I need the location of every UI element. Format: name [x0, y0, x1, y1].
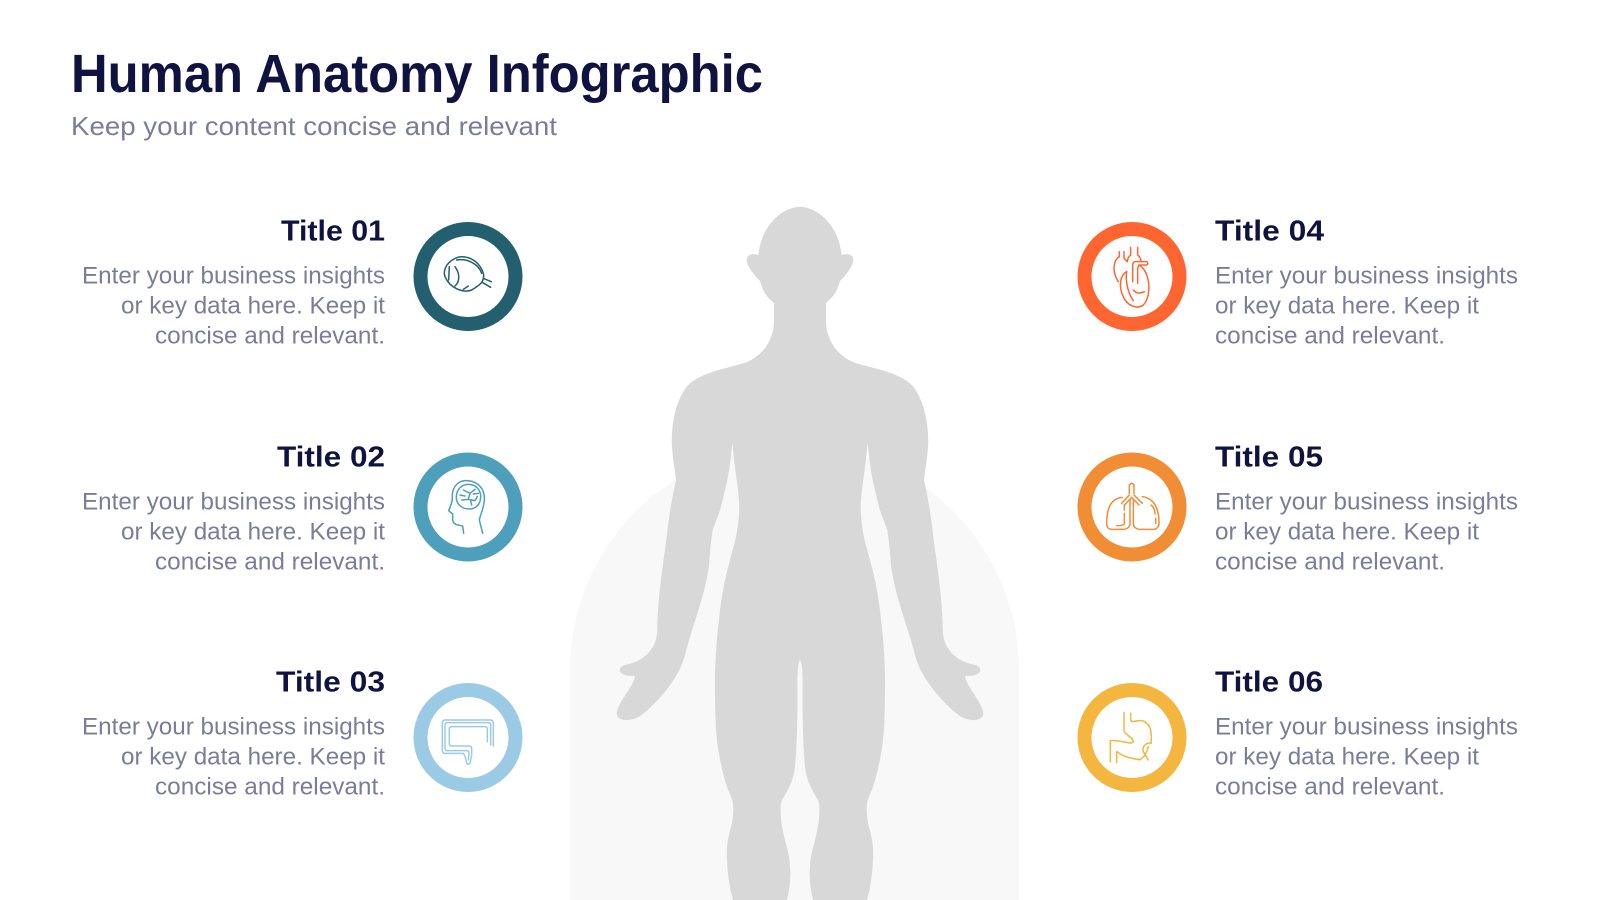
panel: title 06 [1084, 666, 1518, 800]
panel: title 05 [1084, 441, 1518, 575]
icon: brain in head [420, 460, 516, 554]
text block: title 06: or key data here. Keep it [1215, 744, 1479, 770]
heading: title 03: Title 03 [276, 666, 385, 698]
human body silhouette [617, 207, 983, 900]
text block: title 01: concise and relevant. [155, 322, 385, 349]
title: Human Anatomy Infographic [71, 44, 763, 104]
text block: title 03: Enter your business insights [82, 714, 385, 740]
text block: title 02: Enter your business insights [82, 488, 385, 515]
icon: stomach [1084, 690, 1180, 785]
text block: title 05: Enter your business insights [1215, 488, 1518, 515]
panel: title 01 [82, 215, 516, 349]
panel: title 04 [1084, 215, 1518, 349]
panel: title 03 [82, 666, 516, 800]
text block: title 01: or key data here. Keep it [121, 292, 385, 319]
text block: title 06: Enter your business insights [1215, 714, 1518, 740]
subtitle: Keep your content concise and relevant [71, 111, 558, 141]
text block: title 03: or key data here. Keep it [121, 744, 385, 770]
panel: title 02 [82, 441, 516, 575]
heading: title 01: Title 01 [281, 215, 385, 247]
text block: title 03: concise and relevant. [155, 774, 385, 800]
text block: title 04: or key data here. Keep it [1215, 292, 1479, 319]
text block: title 05 [1215, 488, 1518, 575]
text block: title 06 [1215, 714, 1518, 800]
text block: title 02 [82, 488, 385, 575]
text block: title 02: concise and relevant. [155, 548, 385, 575]
icon: eye [420, 229, 516, 324]
icon: lungs [1084, 460, 1180, 554]
text block: title 02: or key data here. Keep it [121, 518, 385, 545]
text block: title 01: Enter your business insights [82, 262, 385, 289]
text block: title 05: or key data here. Keep it [1215, 518, 1479, 545]
text block: title 04 [1215, 262, 1518, 349]
heading: title 04: Title 04 [1215, 215, 1324, 247]
icon: intestine [420, 690, 516, 785]
text block: title 05: concise and relevant. [1215, 548, 1445, 575]
text block: title 04: concise and relevant. [1215, 322, 1445, 349]
text block: title 03 [82, 714, 385, 800]
text block: title 01 [82, 262, 385, 349]
icon: heart [1084, 229, 1180, 324]
text block: title 04: Enter your business insights [1215, 262, 1518, 289]
background arch [570, 446, 1019, 900]
text block: title 06: concise and relevant. [1215, 774, 1445, 800]
heading: title 06: Title 06 [1215, 666, 1323, 698]
heading: title 05: Title 05 [1215, 441, 1323, 473]
heading: title 02: Title 02 [277, 441, 385, 473]
